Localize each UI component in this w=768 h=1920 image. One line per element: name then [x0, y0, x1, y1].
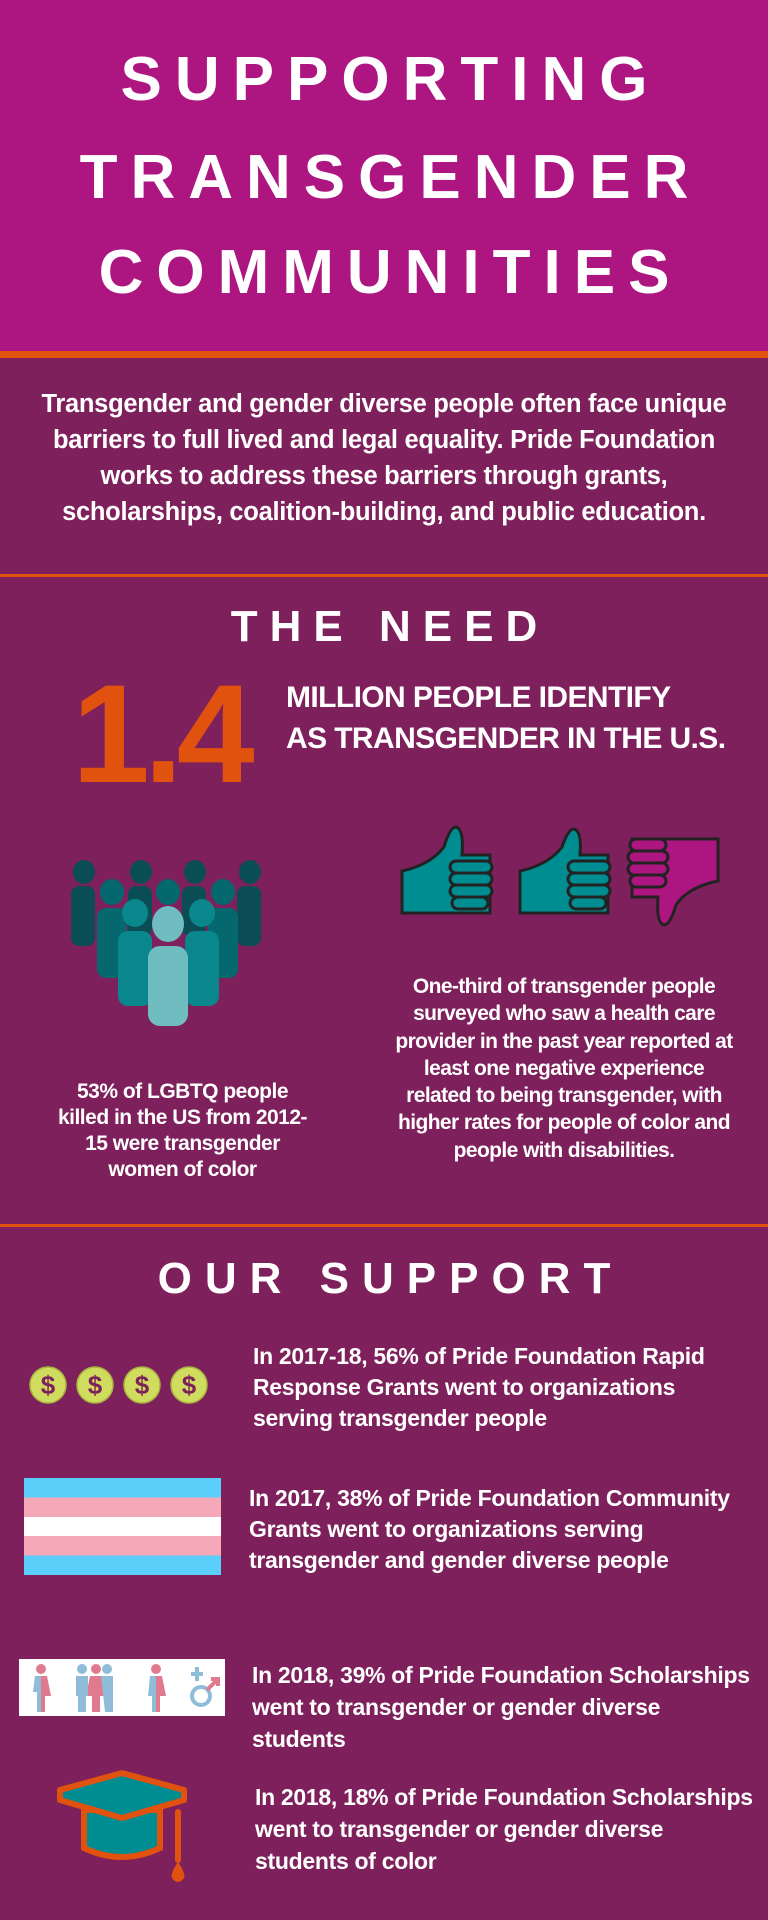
text: killed stat	[58, 1080, 307, 1181]
text: health care stat: related to being transgender, with	[406, 1084, 722, 1107]
text: killed stat: women of color	[108, 1158, 257, 1181]
text: killed stat: 53% of LGBTQ people	[77, 1080, 288, 1103]
stat label	[286, 681, 725, 755]
text: rapid response grants: In 2017-18, 56% of Pride Foundation Rapid	[253, 1343, 705, 1369]
text: scholarships students of color	[254, 1784, 753, 1874]
icon: gender figures	[19, 1659, 225, 1716]
text: killed stat: killed in the US from 2012-	[58, 1106, 307, 1129]
text: health care stat: least one negative experience	[424, 1057, 704, 1080]
text: scholarships students of color: In 2018, 18% of Pride Foundation Scholarships	[255, 1784, 753, 1810]
text: health care stat: provider in the past year reported at	[395, 1030, 733, 1053]
header panel	[0, 0, 768, 351]
text: community grants: In 2017, 38% of Pride Foundation Community	[249, 1485, 730, 1511]
text: scholarships	[252, 1662, 750, 1752]
title: TRANSGENDER	[80, 143, 701, 212]
big stat 1.4: 1.4	[72, 655, 249, 812]
text: rapid response grants: serving transgender people	[253, 1405, 547, 1431]
icon: coins: $	[41, 1370, 56, 1400]
title: SUPPORTING	[121, 45, 660, 114]
text: health care stat	[395, 975, 733, 1162]
intro text: scholarships, coalition-building, and public education.	[62, 498, 706, 526]
intro text: barriers to full lived and legal equality. Pride Foundation	[53, 426, 715, 454]
text: health care stat: higher rates for people of color and	[398, 1111, 730, 1134]
icon: people group	[71, 860, 261, 1026]
text: scholarships: In 2018, 39% of Pride Foundation Scholarships	[252, 1662, 750, 1688]
intro text	[42, 390, 726, 526]
text: scholarships students of color: students of color	[255, 1848, 436, 1874]
icon: trans flag	[24, 1478, 221, 1575]
text: scholarships: went to transgender or gender diverse	[252, 1694, 660, 1720]
stat label: AS TRANSGENDER IN THE U.S.	[286, 722, 725, 755]
icon: coins	[29, 1366, 208, 1404]
text: scholarships: students	[252, 1726, 345, 1752]
stat label: MILLION PEOPLE IDENTIFY	[286, 681, 671, 714]
icon: coins: $	[135, 1370, 150, 1400]
intro text: works to address these barriers through grants,	[101, 462, 667, 490]
text: rapid response grants: Response Grants went to organizations	[253, 1374, 675, 1400]
icon: coins: $	[182, 1370, 197, 1400]
text: killed stat: 15 were transgender	[85, 1132, 280, 1155]
text: health care stat: One-third of transgender people	[413, 975, 715, 998]
heading: our support: OUR SUPPORT	[158, 1254, 623, 1303]
heading: the need: THE NEED	[231, 602, 549, 651]
title	[80, 45, 701, 307]
text: health care stat: people with disabilities.	[454, 1139, 674, 1162]
text: scholarships students of color: went to transgender or gender diverse	[255, 1816, 663, 1842]
text: rapid response grants	[253, 1343, 705, 1431]
text: community grants	[249, 1485, 730, 1573]
title: COMMUNITIES	[99, 238, 682, 307]
text: community grants: transgender and gender diverse people	[249, 1547, 669, 1573]
icon: thumbs up/down	[400, 826, 720, 926]
icon: graduation cap	[57, 1770, 187, 1882]
text: health care stat: surveyed who saw a health care	[413, 1002, 715, 1025]
text: community grants: Grants went to organizations serving	[249, 1516, 643, 1542]
intro text: Transgender and gender diverse people often face unique	[42, 390, 726, 418]
icon: coins: $	[88, 1370, 103, 1400]
